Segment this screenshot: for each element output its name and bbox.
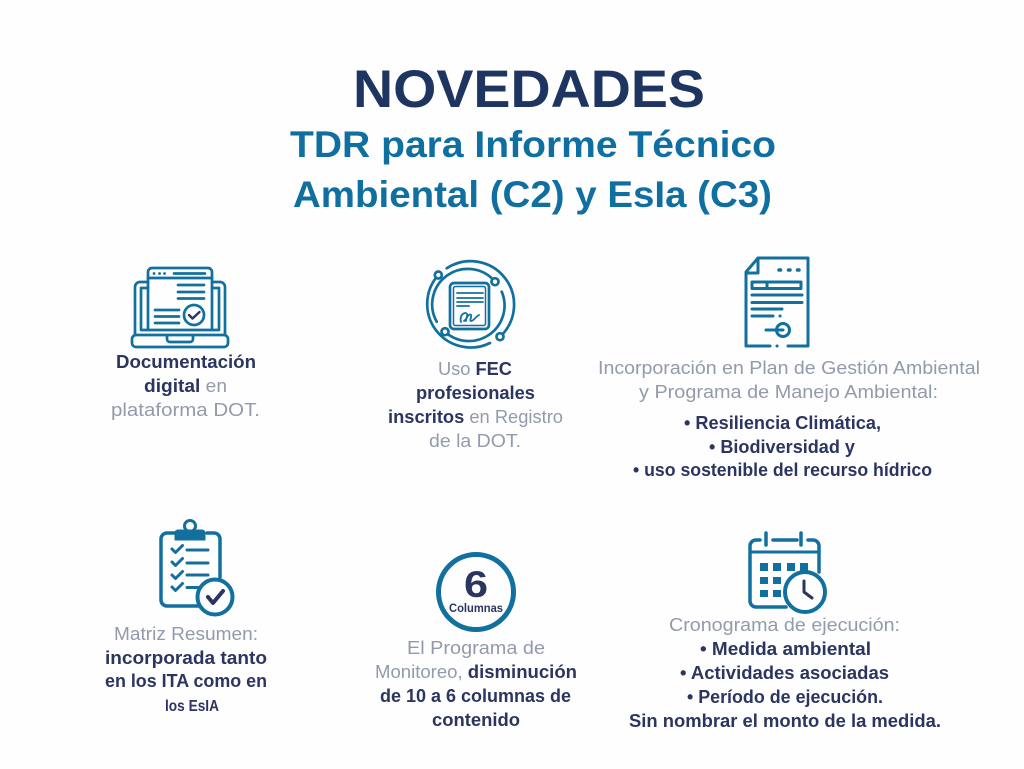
title block bbox=[290, 60, 776, 215]
text: matriz resumen: Matriz Resumen: bbox=[114, 624, 258, 644]
text: matriz resumen: en los ITA como en bbox=[105, 671, 267, 691]
text: plan de gestión ambiental: • Biodiversidad y bbox=[709, 437, 855, 457]
text: uso FEC bbox=[388, 359, 563, 451]
text: uso FEC: Uso FEC bbox=[438, 359, 512, 379]
panel: plan de gestión ambiental bbox=[598, 258, 980, 480]
text: documentación digital bbox=[111, 352, 260, 420]
text: cronograma: • Medida ambiental bbox=[700, 639, 871, 659]
text: plan de gestión ambiental bbox=[598, 358, 980, 480]
text: cronograma bbox=[629, 615, 941, 731]
text: documentación digital: digital en bbox=[144, 376, 227, 396]
text: cronograma: • Período de ejecución. bbox=[687, 687, 883, 707]
panel: documentación digital bbox=[111, 268, 260, 420]
icon: 6 columnas badge bbox=[438, 554, 514, 630]
icon: laptop with document bbox=[132, 268, 228, 347]
text: programa de monitoreo bbox=[375, 638, 577, 730]
panel: programa de monitoreo bbox=[375, 554, 577, 730]
text: documentación digital: plataforma DOT. bbox=[111, 400, 260, 420]
text: uso FEC: profesionales bbox=[416, 383, 535, 403]
icon: 6 columnas badge: 6 bbox=[464, 564, 488, 605]
icon: clipboard with check bbox=[161, 520, 232, 614]
text: cronograma: • Actividades asociadas bbox=[680, 663, 889, 683]
subtitle line 2: Ambiental (C2) y EsIa (C3) bbox=[293, 174, 772, 215]
text: cronograma: Cronograma de ejecución: bbox=[669, 615, 900, 635]
text: matriz resumen: los EsIA bbox=[165, 698, 219, 715]
text: programa de monitoreo: El Programa de bbox=[407, 638, 545, 658]
text: plan de gestión ambiental: Incorporación en Plan de Gestión Ambiental bbox=[598, 358, 980, 378]
panel: uso FEC bbox=[388, 261, 563, 451]
text: matriz resumen: incorporada tanto bbox=[105, 648, 267, 668]
text: matriz resumen bbox=[105, 624, 267, 715]
text: programa de monitoreo: contenido bbox=[432, 710, 520, 730]
text: uso FEC: inscritos en Registro bbox=[388, 407, 563, 427]
text: plan de gestión ambiental: • Resiliencia Climática, bbox=[684, 413, 881, 433]
text: programa de monitoreo: Monitoreo, disminución bbox=[375, 662, 577, 682]
text: cronograma: Sin nombrar el monto de la medida. bbox=[629, 711, 941, 731]
text: plan de gestión ambiental: • uso sostenible del recurso hídrico bbox=[633, 460, 932, 480]
subtitle line 1: TDR para Informe Técnico bbox=[290, 124, 776, 165]
icon: calendar with clock bbox=[750, 533, 825, 612]
text: plan de gestión ambiental: y Programa de Manejo Ambiental: bbox=[639, 382, 938, 402]
title: NOVEDADES: NOVEDADES bbox=[353, 60, 705, 119]
text: uso FEC: de la DOT. bbox=[429, 431, 521, 451]
text: programa de monitoreo: de 10 a 6 columnas de bbox=[380, 686, 571, 706]
panel: matriz resumen bbox=[105, 520, 267, 715]
icon: document with seal bbox=[746, 258, 808, 346]
icon: signed document in rings bbox=[427, 261, 514, 348]
panel: cronograma bbox=[629, 533, 941, 731]
text: documentación digital: Documentación bbox=[116, 352, 256, 372]
icon: 6 columnas badge: Columnas bbox=[449, 603, 503, 615]
